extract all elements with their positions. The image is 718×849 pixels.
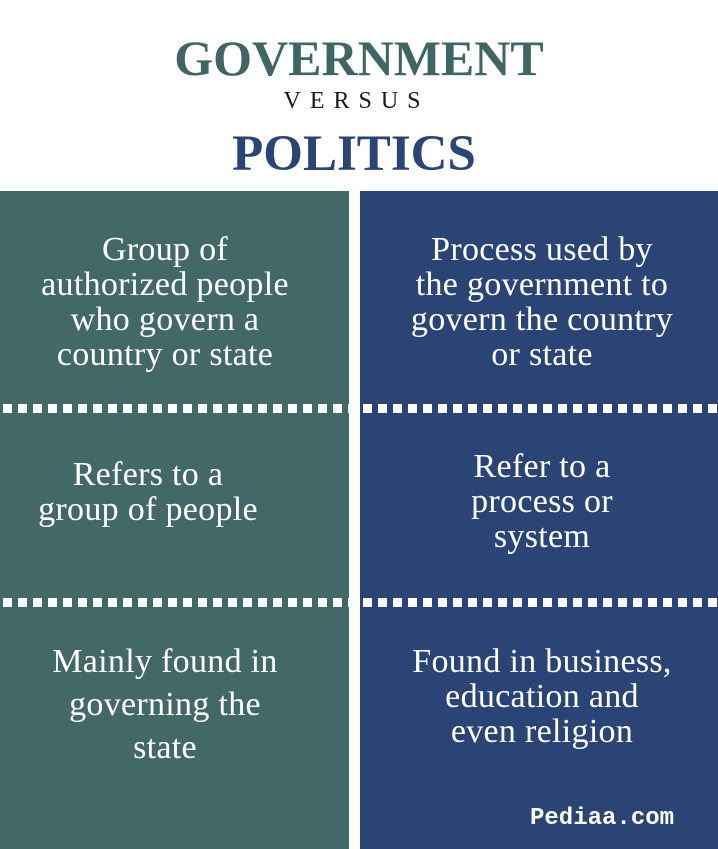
text: definition: or state [491, 336, 593, 373]
text: definition: Process used by [431, 231, 653, 268]
panel: politics [360, 191, 718, 849]
text: found [412, 643, 672, 750]
text: refers [38, 456, 258, 528]
text: found: even religion [451, 713, 633, 750]
panel: government [0, 191, 349, 849]
heading: versus: VERSUS [283, 88, 430, 114]
text: definition: govern the country [411, 301, 673, 338]
text: refers: group of people [38, 491, 258, 528]
heading: government: GOVERNMENT [174, 30, 544, 86]
logo: pediaa: Pediaa.com [530, 805, 674, 832]
text: definition [411, 231, 673, 373]
text: definition [41, 231, 289, 373]
text: found: Found in business, [412, 643, 672, 680]
text: found: governing the [69, 686, 261, 723]
text: found: Mainly found in [52, 643, 278, 680]
text: refers: system [494, 518, 590, 555]
heading: politics: POLITICS [232, 126, 476, 182]
text: found: state [133, 729, 197, 766]
text: refers: process or [471, 483, 613, 520]
title [174, 30, 544, 182]
text: definition: who govern a [71, 301, 259, 338]
text: refers: Refers to a [73, 456, 223, 493]
text: definition: Group of [102, 231, 228, 268]
text: definition: authorized people [41, 266, 289, 303]
text: found [52, 643, 278, 766]
text: definition: country or state [57, 336, 273, 373]
text: refers: Refer to a [473, 448, 611, 485]
text: refers [471, 448, 613, 555]
text: definition: the government to [416, 266, 668, 303]
text: found: education and [445, 678, 639, 715]
